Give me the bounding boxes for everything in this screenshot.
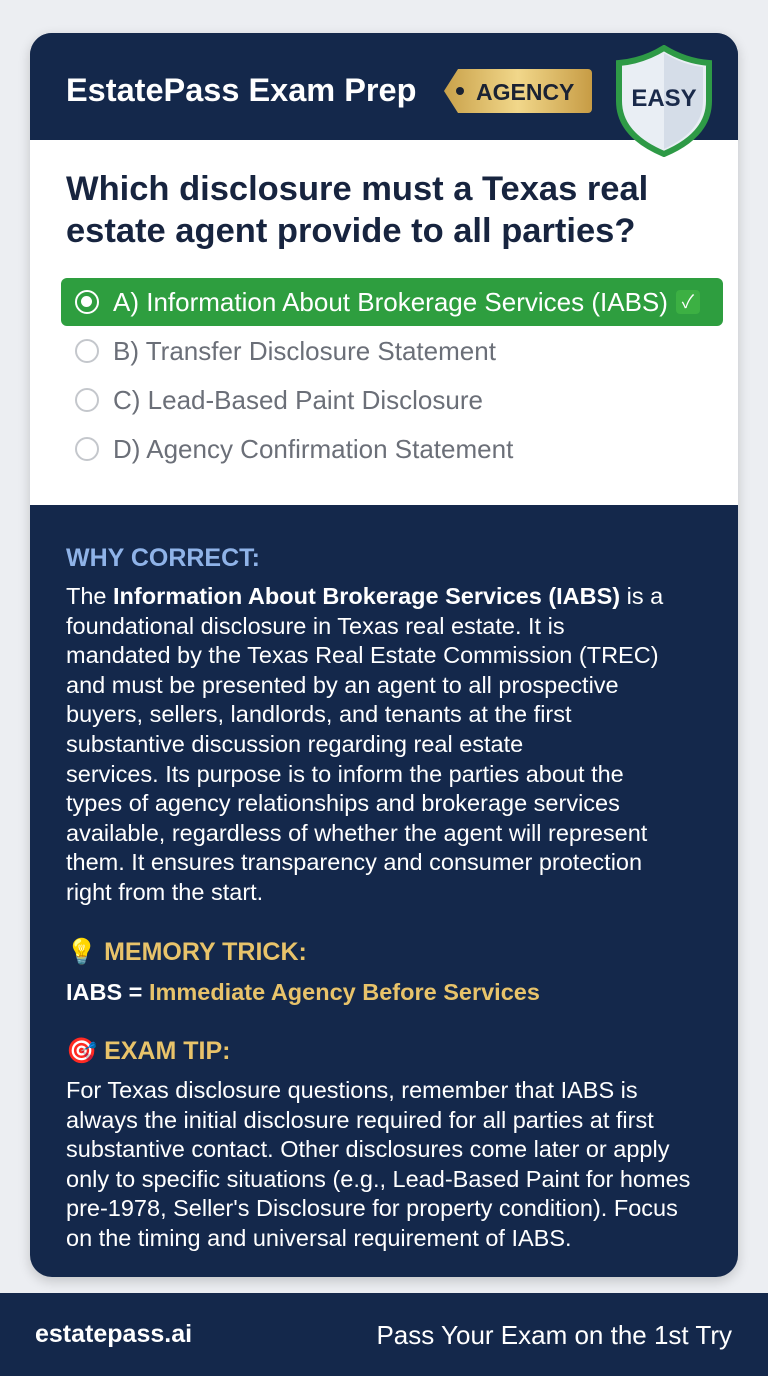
exam tip text: substantive contact. Other disclosures come later or apply (66, 1136, 669, 1162)
why correct text: them. It ensures transparency and consumer protection (66, 849, 642, 875)
tag: agency: AGENCY (476, 79, 574, 105)
option A correct (61, 278, 723, 326)
exam tip text: only to specific situations (e.g., Lead-Based Paint for homes (66, 1166, 690, 1192)
why correct heading: WHY CORRECT: (66, 544, 260, 572)
title: EstatePass Exam Prep (66, 72, 416, 108)
option B: B) Transfer Disclosure Statement (113, 336, 496, 366)
option A correct: ✓ (682, 292, 694, 312)
footer tagline: Pass Your Exam on the 1st Try (376, 1320, 732, 1350)
header (30, 33, 738, 140)
why correct text: services. Its purpose is to inform the parties about the (66, 761, 624, 787)
footer (0, 1293, 768, 1376)
option D: D) Agency Confirmation Statement (113, 434, 513, 464)
question (66, 170, 648, 250)
exam tip text: pre-1978, Seller's Disclosure for property condition). Focus (66, 1195, 678, 1221)
why correct text: The Information About Brokerage Services (IABS) is a (66, 583, 663, 609)
why correct text: right from the start. (66, 879, 263, 905)
exam tip heading: 🎯 EXAM TIP: (66, 1037, 230, 1065)
why correct text: types of agency relationships and brokerage services (66, 790, 620, 816)
badge: easy shield (616, 45, 712, 157)
question: estate agent provide to all parties? (66, 212, 635, 250)
tag: agency (444, 69, 592, 113)
white question panel (30, 140, 738, 505)
option A correct: A) Information About Brokerage Services (IABS) (113, 286, 668, 316)
badge: easy shield: EASY (631, 85, 697, 112)
why correct text: and must be presented by an agent to all prospective (66, 672, 619, 698)
exam tip text (66, 1077, 690, 1251)
why correct text (66, 583, 664, 905)
why correct text: available, regardless of whether the agent will represent (66, 820, 647, 846)
question: Which disclosure must a Texas real (66, 170, 648, 208)
why correct text: substantive discussion regarding real estate (66, 731, 523, 757)
option C: C) Lead-Based Paint Disclosure (113, 384, 483, 414)
exam tip text: always the initial disclosure required for all parties at first (66, 1107, 654, 1133)
why correct text: buyers, sellers, landlords, and tenants at the first (66, 701, 572, 727)
memory trick heading: 💡 MEMORY TRICK: (66, 938, 307, 966)
footer brand: estatepass.ai (35, 1320, 192, 1348)
exam tip text: For Texas disclosure questions, remember that IABS is (66, 1077, 638, 1103)
why correct text: mandated by the Texas Real Estate Commission (TREC) (66, 642, 659, 668)
exam tip text: on the timing and universal requirement of IABS. (66, 1225, 572, 1251)
memory trick text: IABS = Immediate Agency Before Services (66, 979, 540, 1005)
why correct text: foundational disclosure in Texas real estate. It is (66, 613, 565, 639)
